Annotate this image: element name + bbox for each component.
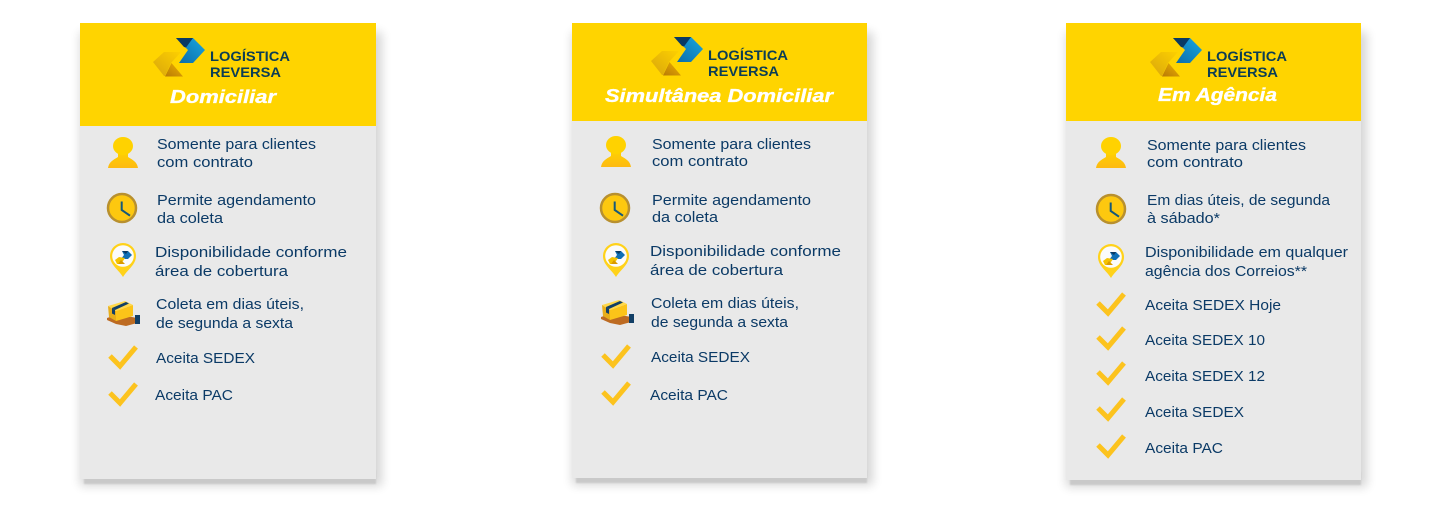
text: PAC: Aceita PAC: [1145, 441, 1223, 457]
text: pickup days: de segunda a sexta: [651, 315, 789, 331]
logo: Logística Reversa: LOGÍSTICA: [1207, 48, 1287, 64]
text: pickup days: [651, 296, 799, 331]
logo: Logística Reversa: [153, 38, 290, 80]
text: scheduling: [652, 193, 811, 226]
text: contract: Somente para clientes: [157, 137, 316, 153]
icon: person: [601, 136, 631, 167]
text: SEDEX: Aceita SEDEX: [156, 351, 255, 367]
icon: check SEDEX Hoje: [1098, 294, 1124, 313]
icon: location pin: [603, 243, 629, 277]
icon: package: [107, 301, 140, 326]
logo: Logística Reversa: LOGÍSTICA: [210, 48, 290, 64]
text: availability: Disponibilidade conforme: [650, 244, 841, 260]
icon: check PAC: [603, 383, 629, 402]
text: contract: [652, 137, 811, 170]
text: contract: com contrato: [652, 154, 748, 170]
text: contract: [157, 137, 316, 171]
text: contract: com contrato: [157, 155, 253, 171]
text: pickup days: Coleta em dias úteis,: [156, 297, 304, 313]
icon: check SEDEX: [603, 346, 629, 365]
text: days: à sábado*: [1147, 211, 1220, 227]
icon: clock: [1097, 195, 1125, 223]
text: pickup days: de segunda a sexta: [156, 316, 294, 332]
text: contract: Somente para clientes: [652, 137, 811, 153]
text: scheduling: Permite agendamento: [652, 193, 811, 209]
icon: check SEDEX: [1098, 399, 1124, 418]
icon: check SEDEX 12: [1098, 363, 1124, 382]
panel: Em Agência: [1066, 23, 1367, 487]
icon: check SEDEX: [110, 347, 136, 366]
panel: Domiciliar: [80, 23, 382, 486]
panel header: Em Agência: [1066, 23, 1361, 121]
text: availability: Disponibilidade conforme: [155, 245, 347, 261]
icon: clock: [108, 194, 136, 222]
logo: Logística Reversa: REVERSA: [708, 63, 779, 79]
icon: check SEDEX 10: [1098, 328, 1124, 347]
text: availability: agência dos Correios**: [1145, 264, 1307, 280]
text: SEDEX: Aceita SEDEX: [1145, 405, 1244, 421]
logo: Logística Reversa: REVERSA: [210, 64, 281, 80]
text: scheduling: [157, 193, 316, 227]
icon: clock: [601, 194, 629, 222]
logo: Logística Reversa: LOGÍSTICA: [708, 47, 788, 63]
text: availability: Disponibilidade em qualquer: [1145, 245, 1348, 261]
text: days: Em dias úteis, de segunda: [1147, 193, 1331, 209]
icon: location pin: [1098, 244, 1124, 278]
panel header: Simultânea Domiciliar: [572, 23, 867, 121]
text: scheduling: Permite agendamento: [157, 193, 316, 209]
logo: Logística Reversa: [1150, 38, 1287, 80]
text: availability: [1145, 245, 1348, 280]
text: contract: Somente para clientes: [1147, 138, 1306, 154]
heading: Simultânea Domiciliar: Simultânea Domiciliar: [605, 85, 835, 106]
heading: Em Agência: Em Agência: [1158, 84, 1277, 105]
icon: location pin: [110, 243, 136, 277]
text: contract: [1147, 138, 1306, 171]
text: pickup days: Coleta em dias úteis,: [651, 296, 799, 312]
icon: check PAC: [110, 384, 136, 403]
text: days: [1147, 193, 1331, 227]
panel: Simultânea Domiciliar: [572, 23, 873, 485]
text: pickup days: [156, 297, 304, 332]
text: SEDEX 12: Aceita SEDEX 12: [1145, 369, 1265, 385]
text: availability: área de cobertura: [155, 264, 289, 280]
panel header: Domiciliar: [80, 23, 376, 126]
text: PAC: Aceita PAC: [650, 388, 728, 404]
text: SEDEX 10: Aceita SEDEX 10: [1145, 333, 1265, 349]
icon: package: [601, 300, 634, 325]
text: availability: [650, 244, 841, 279]
logo: Logística Reversa: REVERSA: [1207, 64, 1278, 80]
icon: person: [1096, 137, 1126, 168]
text: contract: com contrato: [1147, 155, 1243, 171]
text: PAC: Aceita PAC: [155, 388, 233, 404]
icon: person: [108, 137, 138, 168]
text: availability: área de cobertura: [650, 263, 784, 279]
text: scheduling: da coleta: [157, 211, 224, 227]
heading: Domiciliar: Domiciliar: [170, 86, 278, 107]
text: scheduling: da coleta: [652, 210, 719, 226]
text: SEDEX Hoje: Aceita SEDEX Hoje: [1145, 298, 1281, 314]
logo: Logística Reversa: [651, 37, 788, 79]
text: SEDEX: Aceita SEDEX: [651, 350, 750, 366]
icon: check PAC: [1098, 436, 1124, 455]
text: availability: [155, 245, 347, 280]
